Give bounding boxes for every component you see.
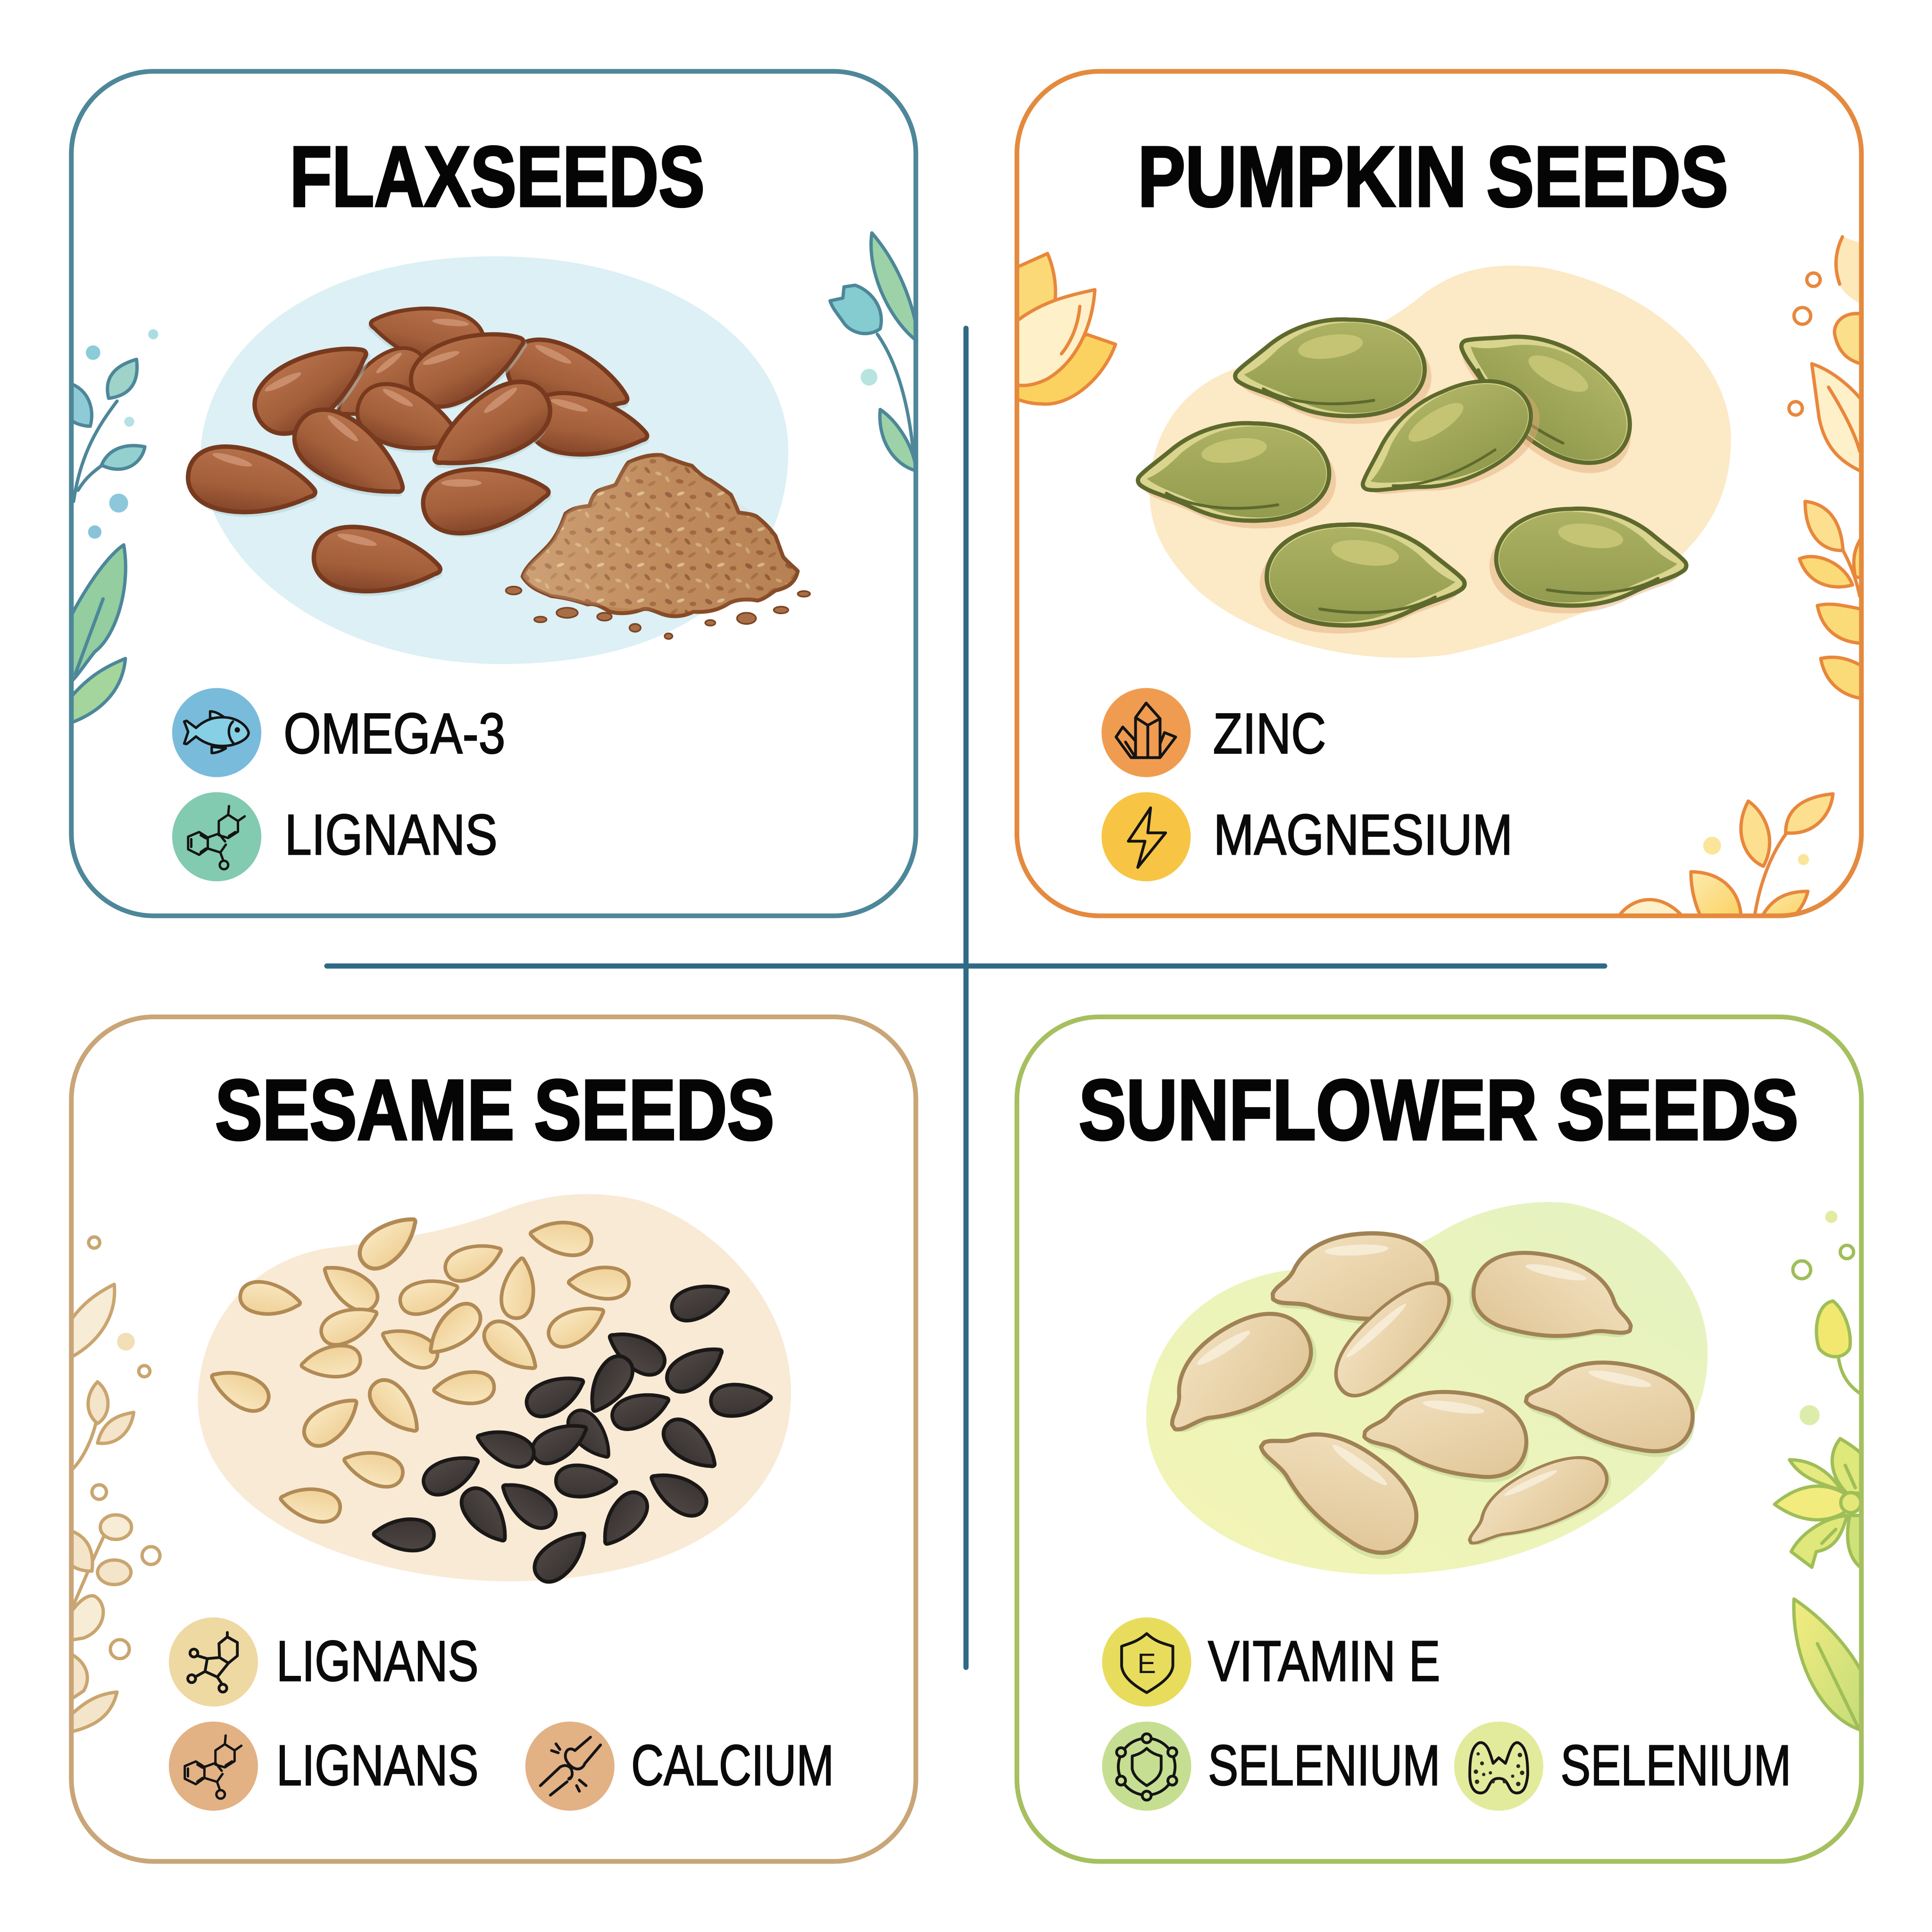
label: lignans: LIGNANS [285,803,498,867]
white sesame seeds [205,1206,629,1525]
label: omega-3: OMEGA-3 [283,701,505,766]
label: lignans: LIGNANS [276,1733,479,1798]
pumpkin seed illustration [1138,296,1686,633]
heading: SUNFLOWER SEEDS [1079,1062,1799,1158]
panel border [1017,71,1861,916]
icon: fish [172,688,261,777]
label: selenium: SELENIUM [1561,1733,1791,1798]
icon: molecule [169,1617,258,1707]
ground flax pile [506,455,810,639]
heading: SESAME SEEDS [215,1062,774,1158]
botanical decoration: sesame [67,1237,160,1732]
label: selenium: SELENIUM [1208,1733,1440,1798]
icon: lignans molecule [169,1722,258,1811]
botanical decoration: flaxseeds [67,233,919,724]
panel border [71,1017,916,1861]
icon: lignans molecule [172,792,261,881]
icon: crystals [1101,688,1191,777]
flaxseed illustration [183,294,654,604]
botanical decoration: pumpkin [1014,237,1866,919]
label: zinc: ZINC [1213,701,1326,766]
black sesame seeds [374,1276,772,1589]
divider: cross lines [327,328,1605,1667]
panel: sunflower seeds [1017,1017,1866,1861]
botanical decoration: sunflower [1774,1211,1866,1732]
heading: PUMPKIN SEEDS [1138,128,1728,225]
icon: joint [525,1722,615,1811]
panel border [1017,1017,1861,1861]
panel: flaxseeds [67,71,919,916]
icon: thyroid [1454,1722,1543,1811]
panel: sesame seeds [67,1017,916,1861]
panel: pumpkin seeds [1014,71,1866,919]
label: magnesium: MAGNESIUM [1214,803,1513,867]
background blob [200,256,788,664]
icon: vitamin e shield [1102,1617,1191,1707]
background blob [198,1194,791,1581]
panel border [71,71,916,916]
label: vitamin e: VITAMIN E [1208,1629,1440,1693]
background blob [1149,266,1731,658]
icon: selenium network shield [1102,1722,1191,1811]
background blob [1146,1202,1707,1574]
label: lignans: LIGNANS [276,1629,479,1693]
heading: FLAXSEEDS [290,128,705,225]
label: calcium: CALCIUM [631,1733,834,1798]
sunflower seed illustration [1144,1230,1704,1575]
icon: lightning bolt [1101,792,1191,881]
icon: vitamin e shield: E [1137,1648,1156,1679]
